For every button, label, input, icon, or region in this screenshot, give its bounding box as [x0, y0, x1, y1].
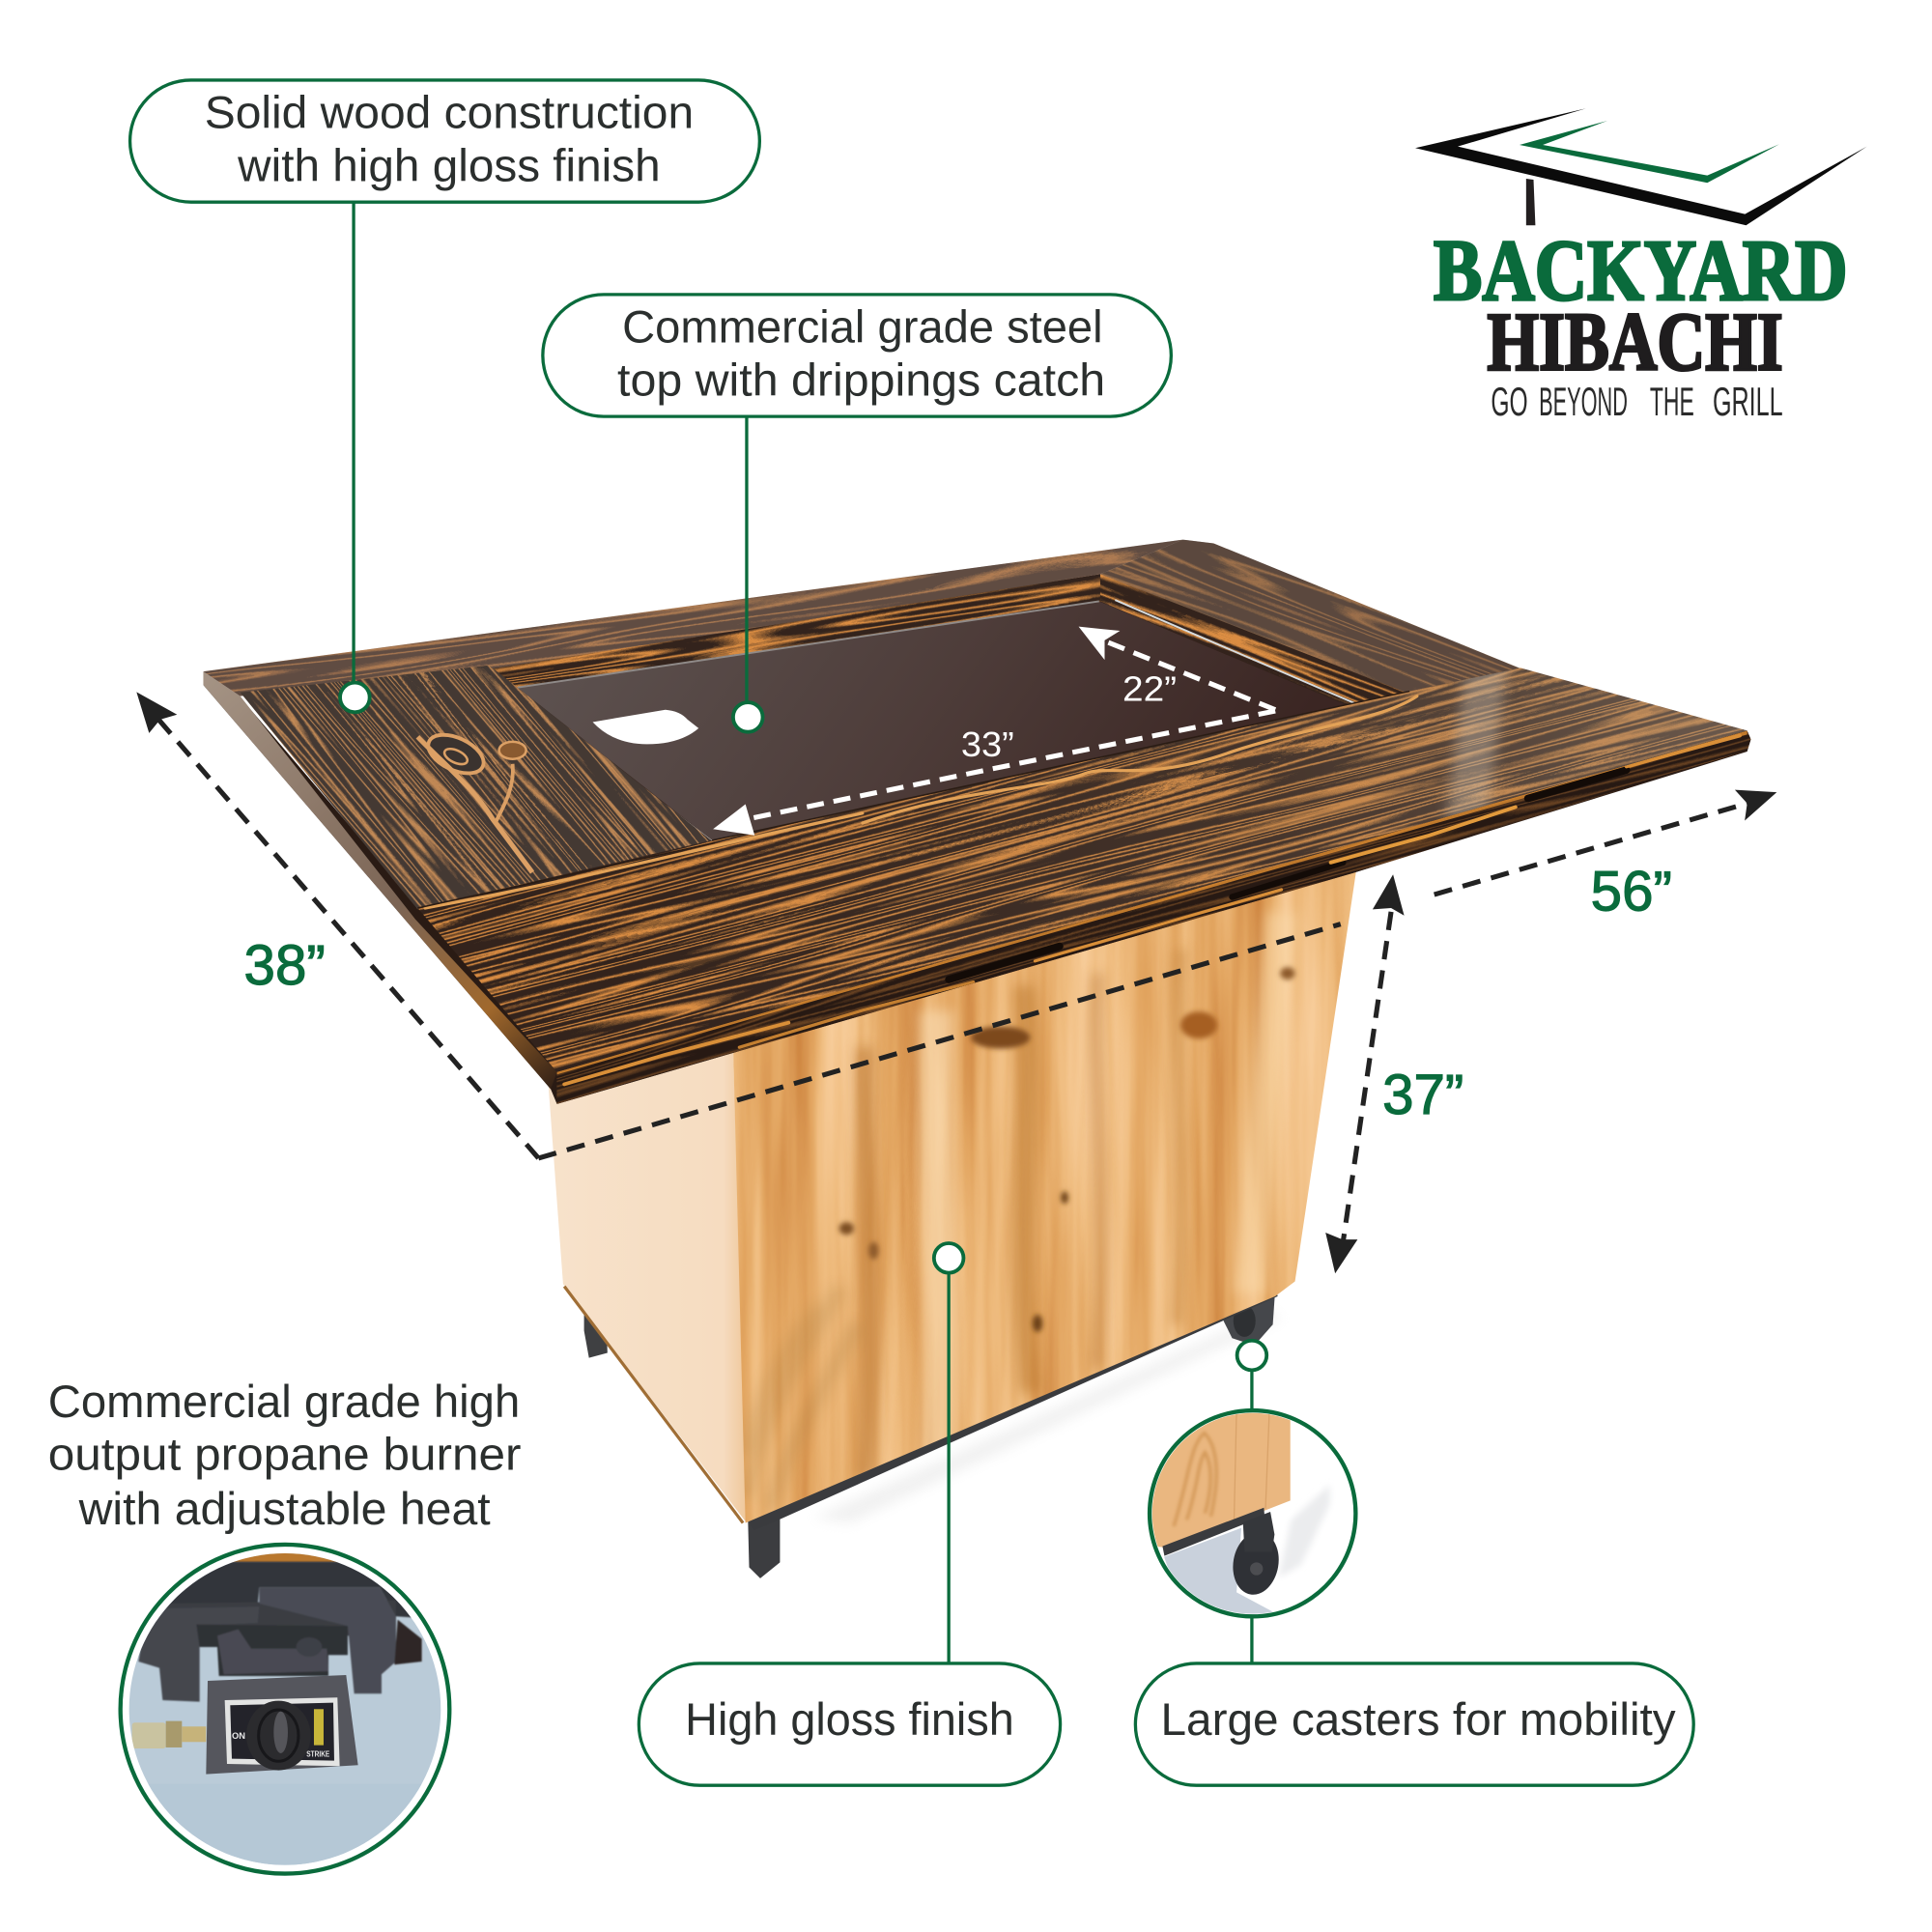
gloss reflection [1439, 670, 1511, 819]
floor [1164, 1528, 1282, 1616]
burn flames [564, 735, 1740, 1084]
label: 37: 37” [1382, 1064, 1463, 1126]
tabletop underside [203, 685, 1750, 1104]
floor shadow [813, 1311, 1282, 1523]
label: 56: 56” [1591, 861, 1672, 923]
knots [839, 967, 1295, 1332]
front board [418, 668, 1747, 1072]
callout: high gloss finish [639, 1243, 1061, 1785]
valve labels: ON [232, 1731, 245, 1741]
swirl grain [744, 1288, 858, 1509]
metal strip [1162, 1508, 1264, 1556]
tabletop left edge [203, 671, 557, 1090]
burner label: output propane burner [48, 1430, 522, 1481]
callout: steel top [543, 295, 1171, 732]
logo: hibachi: HIBACHI [1488, 298, 1783, 388]
right board [1100, 539, 1520, 692]
knot [417, 727, 532, 872]
logo: tagline: GRILL [1713, 379, 1783, 424]
callout: high gloss finish: High gloss finish [685, 1694, 1014, 1746]
callout: casters: Large casters for mobility [1161, 1694, 1676, 1746]
knob [255, 1700, 301, 1771]
back wall of opening [493, 574, 1100, 688]
dimension: 22 inch arrow [1079, 627, 1275, 710]
logo: tagline: THE [1650, 379, 1694, 424]
dimension: width line [538, 924, 1341, 1158]
logo: wordmark: BACKYARD [1434, 221, 1848, 319]
dimension: 33 inch arrow [713, 711, 1275, 836]
left board [241, 666, 711, 910]
table illustration [29, 300, 1859, 1578]
dimension: 56 inch [1435, 790, 1776, 895]
wood streaks [865, 912, 1282, 1479]
callout: steel top: Commercial grade steel [622, 302, 1103, 354]
burner inset: STRIKE [306, 1749, 330, 1758]
logo: tagline [1491, 379, 1783, 424]
board joints [417, 692, 1409, 908]
rear caster [1224, 1289, 1275, 1346]
cabinet left bottom edge [564, 1287, 743, 1523]
burner label [48, 1377, 522, 1535]
logo: roof mark [1415, 108, 1867, 225]
wheel [1233, 1538, 1279, 1595]
burner inset [121, 1545, 449, 1874]
callout: casters [1135, 1341, 1693, 1785]
label: 33: 33” [961, 725, 1014, 764]
yellow marks [314, 1709, 324, 1746]
base frame strip [746, 1289, 1278, 1530]
cabinet front face [727, 850, 1368, 1534]
brass pipe [132, 1722, 166, 1748]
drippings hole [593, 710, 698, 744]
tabletop front edge [556, 730, 1750, 1104]
label: 22: 22” [1122, 670, 1177, 709]
logo: tagline: BEYOND [1539, 379, 1628, 424]
wood panel [1147, 1410, 1291, 1548]
burner casting [128, 1562, 444, 1702]
logo: tagline: GO [1491, 379, 1528, 424]
label: 38: 38” [244, 934, 326, 997]
callout: solid wood [130, 80, 759, 712]
logo [1415, 108, 1867, 424]
valve body [206, 1675, 358, 1775]
dimension: 38 inch [136, 692, 538, 1158]
steel cooking top [493, 574, 1405, 840]
caster inset [1147, 1410, 1355, 1616]
caster shadow [1278, 1485, 1330, 1577]
callout: solid wood: Solid wood construction [205, 88, 694, 139]
back left leg [584, 1293, 608, 1358]
wood sliver [232, 1553, 338, 1563]
dimension: 37 inch [1325, 874, 1405, 1273]
callout: steel top: top with drippings catch [617, 355, 1105, 406]
burner label: with adjustable heat [78, 1484, 491, 1535]
callout: solid wood: with high gloss finish [237, 140, 661, 191]
rear board [203, 539, 1182, 696]
burner label: Commercial grade high [48, 1377, 520, 1428]
front leg [748, 1509, 780, 1578]
right wall of opening [1100, 574, 1405, 703]
burnt grain [425, 696, 1417, 908]
cabinet left face [549, 1045, 747, 1523]
